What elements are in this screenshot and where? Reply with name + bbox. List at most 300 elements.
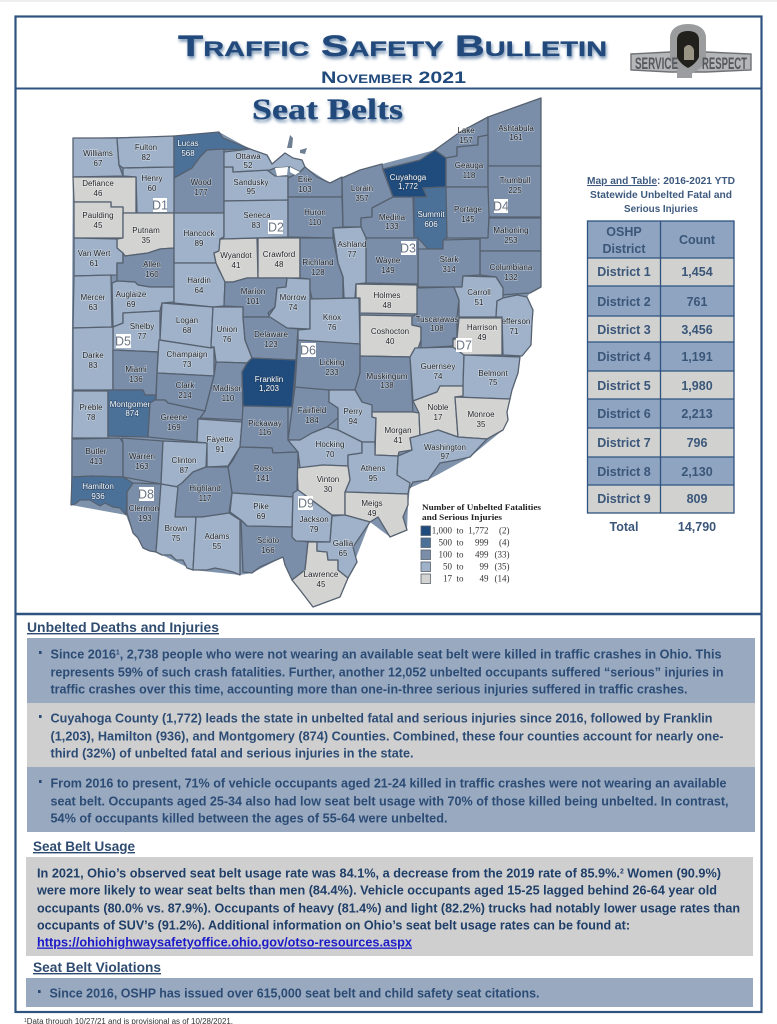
county: Brown: Brown bbox=[165, 524, 187, 533]
county: Licking bbox=[295, 340, 360, 390]
county: Perry: 94 bbox=[349, 417, 358, 426]
county: Scioto: 166 bbox=[261, 546, 275, 555]
county: Champaign: Champaign bbox=[167, 350, 207, 359]
county: Fayette bbox=[197, 419, 242, 467]
county: Scioto: Scioto bbox=[257, 536, 280, 545]
county: Hamilton: 936 bbox=[91, 492, 105, 501]
text block: seat belt usage: https://ohiohighwaysafetyoffice.ohio.gov/otso-resources.aspx bbox=[37, 934, 413, 950]
table: count by OSHP district: District 3 bbox=[597, 323, 651, 337]
county: Washington: Washington bbox=[424, 443, 466, 452]
county: Knox: 76 bbox=[328, 323, 337, 332]
table caption bbox=[587, 175, 735, 215]
table: count by OSHP district: District 2 bbox=[597, 295, 651, 309]
county: Vinton: 30 bbox=[324, 485, 333, 494]
county: Wood bbox=[174, 149, 224, 213]
county: Miami bbox=[113, 350, 158, 395]
county: Licking: 233 bbox=[325, 368, 339, 377]
county: Noble: 17 bbox=[434, 413, 443, 422]
county: Putnam: Putnam bbox=[132, 226, 160, 235]
text block: seat belt violations: Since 2016, OSHP has issued over 615,000 seat belt and child safety seat citations. bbox=[50, 986, 540, 1000]
county: Allen: Allen bbox=[143, 260, 161, 269]
county: Ashtabula: Ashtabula bbox=[498, 124, 534, 133]
county: Portage bbox=[446, 187, 489, 238]
county: Hardin: Hardin bbox=[187, 276, 211, 285]
county: Seneca: Seneca bbox=[243, 211, 271, 220]
county: Hamilton: Hamilton bbox=[82, 482, 114, 491]
table: count by OSHP district: 3,456 bbox=[681, 323, 713, 337]
county: Knox: Knox bbox=[323, 313, 341, 322]
county: Jefferson bbox=[496, 295, 533, 356]
county: Richland: Richland bbox=[302, 258, 334, 267]
county: Coshocton bbox=[360, 315, 421, 357]
county: Highland bbox=[175, 467, 232, 517]
text block: seat belt usage: Women (90.9%) bbox=[624, 866, 721, 880]
county: Muskingum: Muskingum bbox=[367, 372, 408, 381]
county: Morrow bbox=[268, 278, 310, 329]
county: Butler: 413 bbox=[89, 457, 103, 466]
county: Wayne bbox=[366, 238, 418, 284]
county: Geauga: 118 bbox=[463, 171, 476, 180]
county: Cuyahoga bbox=[383, 150, 446, 197]
text block: seat belt usage: occupants (80.0% vs. 87.9%). Occupants of heavy (81.4%) and light (82.2%) trucks had notably lower usage rates than bbox=[37, 900, 740, 916]
county: Ashland bbox=[333, 227, 366, 298]
text block: leading counties bbox=[27, 703, 755, 767]
county: Butler bbox=[72, 438, 123, 477]
county: Richland: 128 bbox=[311, 268, 325, 277]
county: Tuscarawas: Tuscarawas bbox=[416, 315, 458, 324]
county: Ashland: 77 bbox=[348, 250, 357, 259]
county: Paulding: Paulding bbox=[82, 211, 114, 220]
map legend: 17 bbox=[443, 574, 452, 584]
table: count by OSHP district: District 1 bbox=[597, 265, 651, 279]
table: count by OSHP district: OSHP bbox=[606, 225, 642, 239]
county: Williams: Williams bbox=[83, 149, 113, 158]
county: Preble: 78 bbox=[87, 413, 96, 422]
county: Meigs: 49 bbox=[368, 509, 377, 518]
county: Harrison bbox=[453, 318, 502, 355]
county: Portage: 145 bbox=[461, 215, 475, 224]
county: Perry bbox=[329, 390, 376, 442]
county: Hocking bbox=[288, 427, 362, 468]
county: Vinton bbox=[297, 465, 350, 515]
county: Clermont: 193 bbox=[138, 514, 152, 523]
county: Clinton bbox=[161, 441, 207, 487]
county: Highland: 117 bbox=[199, 494, 212, 503]
county: Seneca: 83 bbox=[252, 221, 261, 230]
county: Wyandot bbox=[214, 238, 258, 282]
county: Highland: Highland bbox=[189, 484, 221, 493]
text block: leading counties: Cuyahoga County (1,772) leads the state in unbelted fatal and serious injuries since 2016, followed by Franklin bbox=[50, 710, 713, 726]
heading: Seat Belt Usage: Seat Belt Usage bbox=[33, 838, 135, 854]
table: count by OSHP district: 1,454 bbox=[681, 265, 713, 279]
county: Union: Union bbox=[217, 325, 237, 334]
county: Madison bbox=[200, 362, 247, 420]
county: Hamilton bbox=[71, 476, 133, 515]
table: count by OSHP district: 1,191 bbox=[681, 350, 713, 364]
county: Noble: Noble bbox=[428, 403, 449, 412]
county: Fairfield: 184 bbox=[305, 416, 319, 425]
county: Warren: 163 bbox=[135, 462, 149, 471]
county: Butler: Butler bbox=[86, 447, 107, 456]
table: count by OSHP district: 1,980 bbox=[681, 379, 713, 393]
county: Summit: Summit bbox=[417, 210, 445, 219]
county: Carroll: Carroll bbox=[467, 288, 491, 297]
map legend: (33) bbox=[494, 550, 510, 560]
county: Jefferson: Jefferson bbox=[498, 317, 530, 326]
text block: occupant ages bbox=[27, 767, 755, 832]
county: Summit: 606 bbox=[424, 220, 438, 229]
county: Guernsey: Guernsey bbox=[421, 362, 455, 371]
county: Brown: 75 bbox=[172, 534, 181, 543]
county: Portage: Portage bbox=[454, 205, 483, 214]
county: Crawford: 48 bbox=[275, 260, 284, 269]
county: Morgan: 41 bbox=[394, 436, 403, 445]
county: Harrison: Harrison bbox=[467, 323, 497, 332]
county: Hancock bbox=[174, 213, 224, 263]
county: Clark bbox=[156, 373, 214, 411]
map legend: and Serious Injuries bbox=[422, 512, 503, 522]
county: Cuyahoga: Cuyahoga bbox=[390, 173, 427, 182]
county: Shelby: Shelby bbox=[130, 322, 154, 331]
county: Henry: Henry bbox=[141, 174, 163, 183]
county: Greene: 169 bbox=[167, 423, 181, 432]
county: Sandusky: 95 bbox=[247, 187, 256, 196]
county: Adams: 55 bbox=[213, 542, 222, 551]
county: Fairfield bbox=[288, 387, 338, 440]
table: count by OSHP district: 2,213 bbox=[681, 407, 713, 421]
county: Preble bbox=[72, 391, 108, 438]
county: Morgan: Morgan bbox=[384, 426, 412, 435]
county: Franklin bbox=[242, 358, 296, 407]
county: Jefferson: 71 bbox=[510, 327, 519, 336]
county: Trumbull: 225 bbox=[508, 186, 522, 195]
county: Logan: Logan bbox=[176, 316, 198, 325]
county: Champaign: 73 bbox=[183, 360, 192, 369]
map legend: 49 bbox=[480, 574, 489, 584]
footnote: 1 bbox=[24, 1018, 27, 1024]
county: Trumbull: Trumbull bbox=[500, 176, 531, 185]
county: Athens: 95 bbox=[369, 474, 378, 483]
county: Geauga: Geauga bbox=[455, 161, 484, 170]
county: Darke bbox=[73, 327, 113, 390]
heading: Seat Belts: Seat Belts bbox=[252, 93, 403, 126]
county: Fayette: Fayette bbox=[207, 435, 234, 444]
county: Harrison: 49 bbox=[478, 333, 487, 342]
map: Ohio counties bbox=[71, 98, 541, 607]
county: Lake bbox=[435, 117, 488, 158]
district tag: D9: D9 bbox=[298, 496, 314, 510]
district tag: D1: D1 bbox=[152, 198, 168, 212]
county: Belmont bbox=[455, 355, 520, 399]
county: Medina: Medina bbox=[379, 213, 406, 222]
county: Holmes bbox=[356, 284, 418, 314]
county: Williams: 67 bbox=[94, 159, 103, 168]
county: Hocking: 70 bbox=[326, 450, 335, 459]
table: count by OSHP district: Total bbox=[610, 520, 638, 534]
county: Athens: Athens bbox=[361, 464, 385, 473]
county: Trumbull bbox=[488, 166, 541, 217]
county: Pickaway: 116 bbox=[259, 428, 272, 437]
table caption: Serious Injuries bbox=[624, 203, 698, 215]
county: Ashtabula bbox=[488, 98, 541, 166]
county: Hancock: 89 bbox=[195, 239, 204, 248]
county: Washington bbox=[397, 430, 487, 488]
text block: seat belt usage bbox=[26, 857, 753, 956]
county: Montgomery bbox=[108, 390, 156, 437]
county: Monroe bbox=[455, 397, 510, 439]
lake islands bbox=[287, 135, 307, 154]
county: Paulding: 45 bbox=[94, 221, 103, 230]
map legend: to bbox=[456, 574, 464, 584]
county: Warren bbox=[122, 438, 163, 484]
county: Scioto bbox=[241, 520, 308, 580]
county: Van Wert: Van Wert bbox=[78, 249, 111, 258]
county: Hardin: 64 bbox=[195, 286, 204, 295]
map legend: 50 bbox=[443, 562, 452, 572]
subtitle date: November 2021 bbox=[321, 68, 466, 87]
county: Coshocton: 40 bbox=[386, 337, 395, 346]
county: Hancock: Hancock bbox=[183, 229, 216, 238]
county: Noble bbox=[413, 386, 463, 437]
map legend: 499 bbox=[475, 550, 489, 560]
county: Putnam bbox=[117, 213, 174, 256]
county: Carroll bbox=[454, 276, 503, 317]
county: Auglaize: Auglaize bbox=[116, 290, 147, 299]
text block: seat belt usage: occupants of SUV’s (91.2%). Additional information on Ohio’s seat belt usage rates can be found at: bbox=[37, 918, 630, 932]
district tag: D8: D8 bbox=[138, 488, 154, 502]
county: Geauga bbox=[446, 135, 488, 187]
county: Lake: Lake bbox=[457, 126, 475, 135]
county: Washington: 97 bbox=[441, 452, 450, 461]
county: Fulton: 82 bbox=[142, 153, 151, 162]
county: Huron bbox=[288, 197, 343, 238]
county: Clermont bbox=[127, 483, 162, 552]
map legend: 100 bbox=[438, 550, 452, 560]
county: Mercer: Mercer bbox=[81, 293, 106, 302]
county: Williams bbox=[73, 138, 123, 177]
text block: seat belt usage: 2 bbox=[620, 868, 624, 876]
table: count by OSHP district: District 6 bbox=[597, 407, 651, 421]
county: Pickaway bbox=[240, 406, 298, 453]
county: Preble: Preble bbox=[79, 403, 103, 412]
county: Summit bbox=[414, 187, 447, 249]
county: Ottawa bbox=[224, 149, 305, 172]
county: Defiance bbox=[73, 177, 136, 213]
text block: fatalities summary: , 2,738 people who were not wearing an available seat belt were killed in traffic crashes in Ohio. This bbox=[120, 646, 722, 662]
table caption: Statewide Unbelted Fatal and bbox=[590, 189, 732, 201]
county: Greene bbox=[148, 400, 205, 442]
county: Mahoning: 253 bbox=[504, 236, 518, 245]
county: Van Wert: 61 bbox=[90, 259, 99, 268]
county: Wyandot: 41 bbox=[232, 261, 241, 270]
county: Fayette: 91 bbox=[216, 445, 225, 454]
county: Sandusky: Sandusky bbox=[233, 178, 269, 187]
county: Darke: Darke bbox=[82, 351, 104, 360]
county: Mercer bbox=[73, 275, 112, 328]
county: Wood: 177 bbox=[194, 188, 208, 197]
text block: fatalities summary: represents 59% of such crash fatalities. Further, another 12,052 unbelted occupants suffered “serious” injuries in bbox=[50, 664, 724, 680]
district tag: D3: D3 bbox=[400, 242, 416, 256]
county: Gallia: Gallia bbox=[333, 539, 354, 548]
county: Morrow: 74 bbox=[289, 303, 298, 312]
county: Ottawa: 52 bbox=[244, 161, 253, 170]
county: Defiance: 46 bbox=[94, 189, 103, 198]
county: Perry: Perry bbox=[343, 407, 363, 416]
map legend: to bbox=[456, 550, 464, 560]
table: count by OSHP district: District 5 bbox=[597, 379, 651, 393]
county: Clermont: Clermont bbox=[129, 504, 162, 513]
map legend: 99 bbox=[480, 562, 489, 572]
district tag: D2: D2 bbox=[268, 220, 284, 234]
county: Union bbox=[211, 307, 252, 363]
county: Auglaize bbox=[112, 281, 174, 327]
county: Marion: Marion bbox=[241, 287, 265, 296]
county: Delaware bbox=[243, 317, 298, 360]
county: Coshocton: Coshocton bbox=[371, 327, 409, 336]
county: Putnam: 35 bbox=[142, 236, 151, 245]
county: Montgomery: Montgomery bbox=[110, 400, 154, 409]
county: Pike bbox=[230, 493, 293, 527]
county: Ashtabula: 161 bbox=[509, 133, 523, 142]
district tag: D6: D6 bbox=[300, 344, 316, 358]
text block: fatalities summary: Since 2016 bbox=[50, 646, 118, 662]
county: Fulton: Fulton bbox=[135, 143, 157, 152]
county: Lorain bbox=[342, 164, 393, 227]
county: Pike: 69 bbox=[257, 512, 266, 521]
text block: occupant ages: seat belt. Occupants aged 25-34 also had low seat belt usage with 70% of those killed being unbelted. In contrast, bbox=[50, 794, 728, 808]
county: Darke: 83 bbox=[89, 361, 98, 370]
county: Auglaize: 69 bbox=[127, 300, 136, 309]
county: Jackson bbox=[292, 490, 332, 542]
text block: fatalities summary bbox=[27, 638, 755, 703]
table: count by OSHP district: District 8 bbox=[597, 465, 651, 479]
county: Greene: Greene bbox=[161, 413, 188, 422]
county: Wayne: 149 bbox=[381, 266, 395, 275]
map legend: (2) bbox=[499, 526, 510, 536]
county: Huron: Huron bbox=[304, 208, 326, 217]
map legend bbox=[421, 502, 542, 584]
county: Delaware: 123 bbox=[264, 340, 278, 349]
text block: occupant ages: 54% of occupants killed between the ages of 55-64 were unbelted. bbox=[50, 810, 448, 826]
county: Brown bbox=[156, 484, 196, 570]
county: Mahoning: Mahoning bbox=[493, 226, 529, 235]
county: Adams: Adams bbox=[205, 532, 229, 541]
county: Lucas bbox=[174, 132, 250, 178]
county: Allen bbox=[117, 248, 174, 287]
county: Stark: Stark bbox=[440, 255, 459, 264]
county: Richland bbox=[300, 238, 343, 299]
table: count by OSHP district: 2,130 bbox=[681, 465, 713, 479]
Sandusky Bay water bbox=[275, 167, 300, 176]
county: Columbiana: Columbiana bbox=[490, 263, 533, 272]
county: Stark bbox=[418, 239, 480, 287]
county: Defiance: Defiance bbox=[82, 179, 114, 188]
county: Warren: Warren bbox=[129, 452, 155, 461]
county: Lorain: Lorain bbox=[351, 184, 373, 193]
county: Mercer: 63 bbox=[89, 303, 98, 312]
county: Erie: Erie bbox=[298, 175, 313, 184]
logo: state highway patrol badge bbox=[631, 24, 751, 78]
county: Clinton: 87 bbox=[180, 466, 189, 475]
county: Miami: Miami bbox=[125, 365, 147, 374]
county: Knox bbox=[298, 298, 360, 344]
map legend: Number of Unbelted Fatalities bbox=[422, 502, 542, 512]
text block: occupant ages: From 2016 to present, 71% of vehicle occupants aged 21-24 killed in traffic crashes were not wearing an available bbox=[50, 776, 726, 790]
map legend: (35) bbox=[494, 562, 510, 572]
county: Miami: 136 bbox=[129, 375, 143, 384]
county: Tuscarawas bbox=[412, 287, 459, 348]
county: Carroll: 51 bbox=[475, 298, 484, 307]
county: Seneca bbox=[220, 200, 288, 239]
county: Clinton: Clinton bbox=[172, 456, 196, 465]
table: count by OSHP district: 14,790 bbox=[678, 520, 716, 534]
county: Medina bbox=[361, 197, 414, 238]
table: count by OSHP district: 796 bbox=[687, 436, 707, 450]
county: Tuscarawas: 108 bbox=[430, 324, 444, 333]
county: Lawrence: Lawrence bbox=[304, 570, 339, 579]
county: Wood: Wood bbox=[191, 178, 211, 187]
county: Ross: Ross bbox=[254, 464, 272, 473]
county: Shelby: 77 bbox=[138, 332, 147, 341]
county: Monroe: 35 bbox=[477, 420, 486, 429]
county: Fairfield: Fairfield bbox=[298, 406, 326, 415]
county: Fulton bbox=[117, 136, 174, 168]
text block: seat belt usage: were more likely to wear seat belts than men (84.4%). Vehicle occupants aged 15-25 lagged behind 26-64 year old bbox=[36, 882, 717, 898]
county: Wyandot: Wyandot bbox=[220, 251, 253, 260]
county: Logan bbox=[160, 303, 213, 348]
county: Ross bbox=[228, 447, 298, 497]
county: Paulding bbox=[74, 202, 123, 238]
map legend: 1,772 bbox=[468, 526, 488, 536]
district tag: D7: D7 bbox=[456, 338, 472, 352]
county: Belmont: Belmont bbox=[478, 369, 508, 378]
county: Holmes: Holmes bbox=[373, 291, 401, 300]
county: Ashland: Ashland bbox=[338, 240, 366, 249]
district tag: D5: D5 bbox=[115, 334, 131, 348]
county: Morgan bbox=[372, 412, 420, 456]
county: Lorain: 357 bbox=[355, 194, 369, 203]
county: Montgomery: 874 bbox=[125, 409, 139, 418]
county: Lawrence bbox=[292, 542, 348, 607]
county: Lake: 157 bbox=[459, 136, 473, 145]
table: count by OSHP district: District 9 bbox=[597, 492, 651, 506]
county: Columbiana: 132 bbox=[504, 273, 518, 282]
county: Meigs: Meigs bbox=[361, 499, 383, 508]
table: count by OSHP district: Count bbox=[679, 233, 716, 247]
county: Gallia bbox=[317, 515, 370, 578]
table caption: Map and Table: 2016-2021 YTD bbox=[587, 175, 735, 187]
county: Allen: 160 bbox=[145, 270, 159, 279]
table: count by OSHP district bbox=[588, 221, 734, 534]
county: Pickaway: Pickaway bbox=[248, 419, 282, 428]
county: Marion: 101 bbox=[246, 297, 260, 306]
county: Erie: 103 bbox=[298, 185, 312, 194]
county: Medina: 133 bbox=[385, 222, 399, 231]
map legend: to bbox=[456, 526, 464, 536]
county: Marion bbox=[224, 278, 287, 317]
county: Muskingum: 138 bbox=[380, 381, 394, 390]
county: Franklin: Franklin bbox=[255, 375, 283, 384]
county: Jackson: 79 bbox=[310, 525, 319, 534]
text block: leading counties: (1,203), Hamilton (936), and Montgomery (874) Counties. Combined, these four counties account for nearly one- bbox=[50, 728, 724, 744]
county: Clark: 214 bbox=[178, 391, 192, 400]
county: Mahoning bbox=[480, 218, 541, 251]
map legend: (14) bbox=[494, 574, 510, 584]
map legend: 999 bbox=[475, 538, 489, 548]
text block: fatalities summary: 1 bbox=[116, 650, 120, 656]
map legend: to bbox=[456, 538, 464, 548]
county: Lawrence: 45 bbox=[317, 580, 326, 589]
